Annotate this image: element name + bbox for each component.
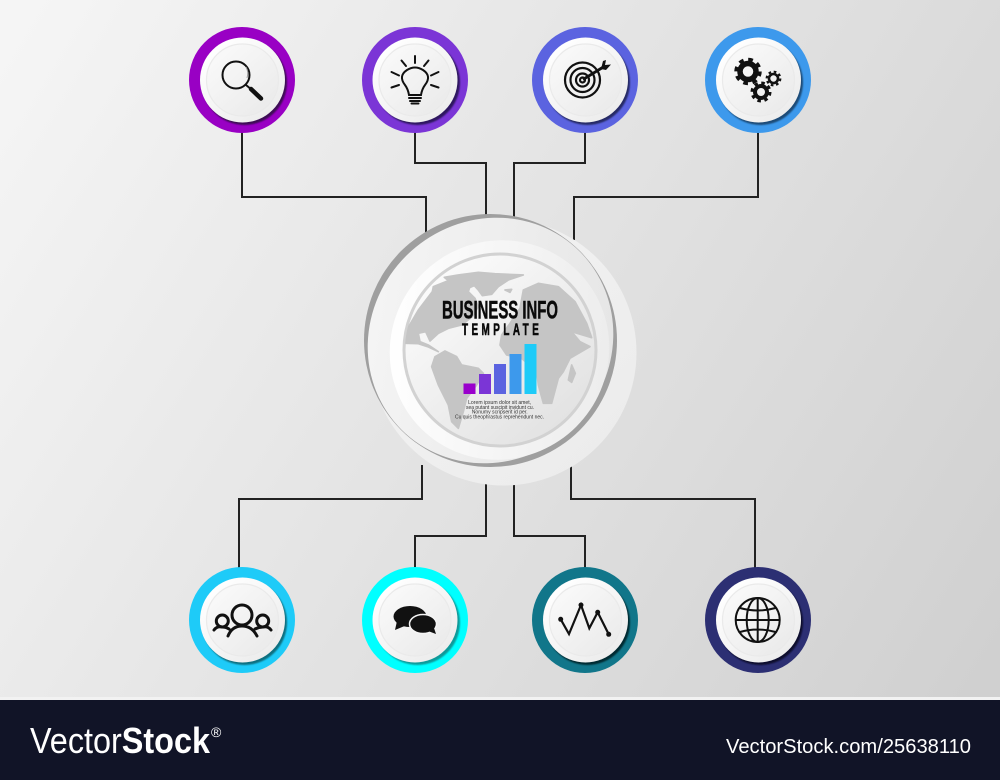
node: trend: [532, 567, 638, 673]
icon: magnifier: [222, 62, 261, 98]
central hub: [364, 214, 636, 486]
connector lines: [239, 130, 758, 570]
footer bar: [0, 697, 1000, 780]
subheading: TEMPLATE: [462, 320, 539, 339]
icon: light bulb: [392, 56, 438, 104]
footer logo: VectorStock: [30, 720, 211, 761]
world map: [405, 272, 592, 428]
registered mark: ®: [211, 724, 222, 740]
description text: Nonumy scripserit id per.: [472, 410, 528, 416]
description text: Lorem ipsum dolor sit amet,: [468, 400, 531, 406]
icon: globe: [736, 598, 780, 642]
icon: speech bubbles: [394, 606, 436, 634]
node: search: [189, 27, 295, 133]
footer id: VectorStock.com/25638110: [726, 736, 971, 758]
node: global: [705, 567, 811, 673]
icon: line chart: [558, 602, 611, 637]
description text: sea putant suscipit invidunt cu.: [466, 405, 534, 411]
node: chat: [362, 567, 468, 673]
node: target: [532, 27, 638, 133]
node: team: [189, 567, 295, 673]
node: idea: [362, 27, 468, 133]
icon: people: [214, 605, 271, 636]
icon: gears: [736, 60, 780, 101]
bar chart: [464, 344, 536, 394]
node: settings: [705, 27, 811, 133]
icon: target: [565, 60, 611, 98]
description text: Cu quis theophrastus reprehendunt nec.: [455, 414, 544, 420]
description text: [455, 400, 544, 420]
heading: BUSINESS INFO: [442, 296, 558, 324]
